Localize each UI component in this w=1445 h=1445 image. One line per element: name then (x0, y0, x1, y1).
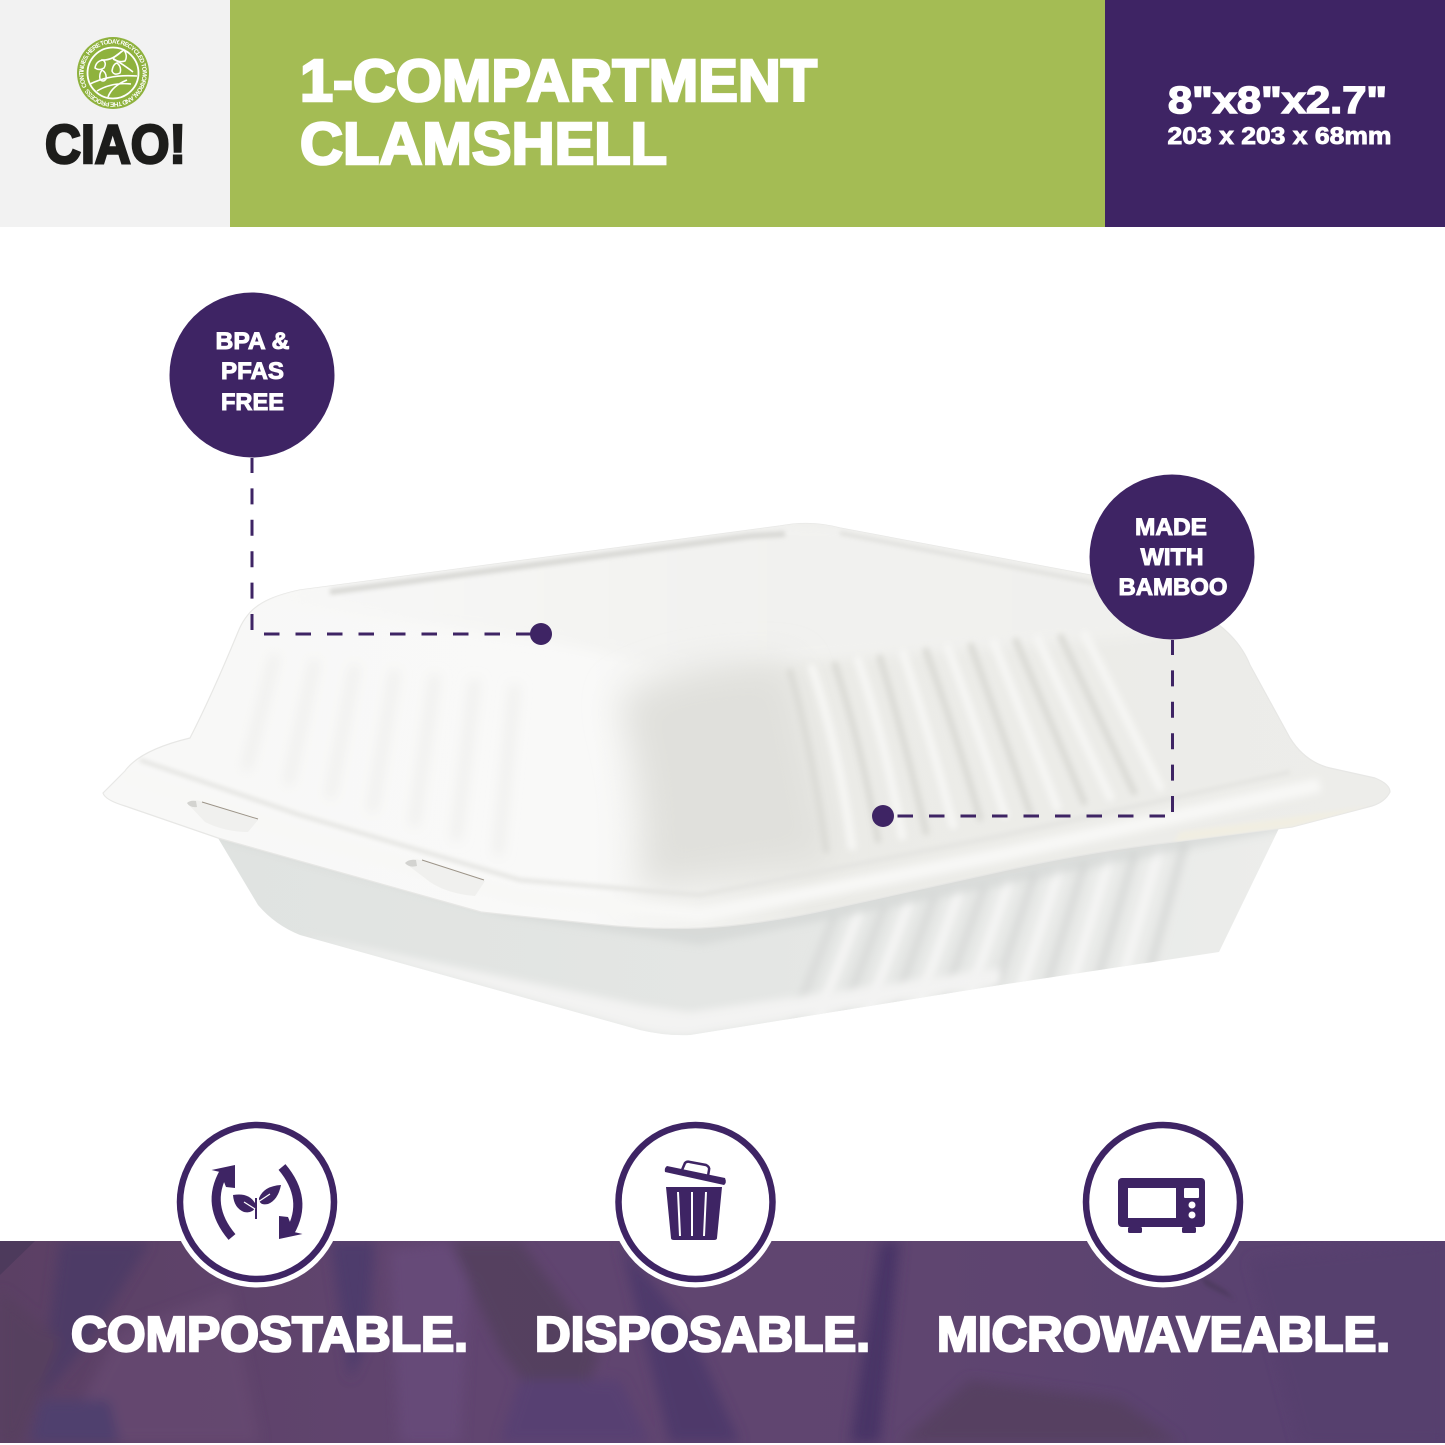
label: disposable: DISPOSABLE. (535, 1308, 870, 1362)
callout: made with bamboo (872, 474, 1254, 827)
bottom band with leaf backdrop (0, 1241, 1445, 1443)
right face ribs (790, 637, 1134, 850)
callout badge: BPA & (216, 328, 290, 355)
callout badge: MADE (1135, 514, 1207, 541)
icon: microwave (1078, 1116, 1248, 1288)
front corner shadow (620, 664, 830, 890)
logo panel (0, 0, 230, 227)
closure tab right (405, 859, 485, 896)
title line 2: CLAMSHELL (300, 111, 667, 177)
callout badge: WITH (1140, 544, 1204, 571)
title panel (230, 0, 1105, 227)
feature: disposable (535, 1116, 870, 1362)
callout leader line (252, 458, 552, 645)
icon: trash can (610, 1116, 781, 1288)
logo badge: CONTINUES. HERE TODAY, RECYCLED TOMORROW, AND THE PROCESS (79, 39, 147, 107)
callout badge: FREE (221, 389, 284, 416)
header bar (0, 0, 1445, 227)
title line 1: 1-COMPARTMENT (300, 48, 817, 114)
closure tab left (187, 800, 258, 832)
feature: microwaveable (937, 1116, 1390, 1362)
container lid (103, 520, 1390, 928)
callout badge (1090, 474, 1254, 640)
callout badge: BAMBOO (1118, 574, 1228, 601)
dimensions in inches: 8"x8"x2.7" (1168, 80, 1387, 122)
icon: compost cycle (172, 1116, 342, 1288)
dimensions panel (1105, 0, 1445, 227)
left face ribs (246, 655, 515, 855)
callout badge (170, 292, 334, 458)
feature: compostable (71, 1116, 468, 1362)
dimensions in millimetres: 203 x 203 x 68mm (1168, 123, 1392, 150)
callout badge: PFAS (221, 358, 284, 385)
label: microwaveable: MICROWAVEABLE. (937, 1308, 1390, 1362)
label: compostable: COMPOSTABLE. (71, 1308, 468, 1362)
callout leader line (872, 640, 1172, 827)
product: clamshell container (103, 520, 1390, 1035)
logo wordmark: CIAO! (45, 113, 186, 175)
container base (218, 829, 1278, 1035)
callout: BPA and PFAS free (170, 292, 552, 645)
lid flange highlight (140, 758, 646, 892)
lid top surface (269, 525, 948, 652)
